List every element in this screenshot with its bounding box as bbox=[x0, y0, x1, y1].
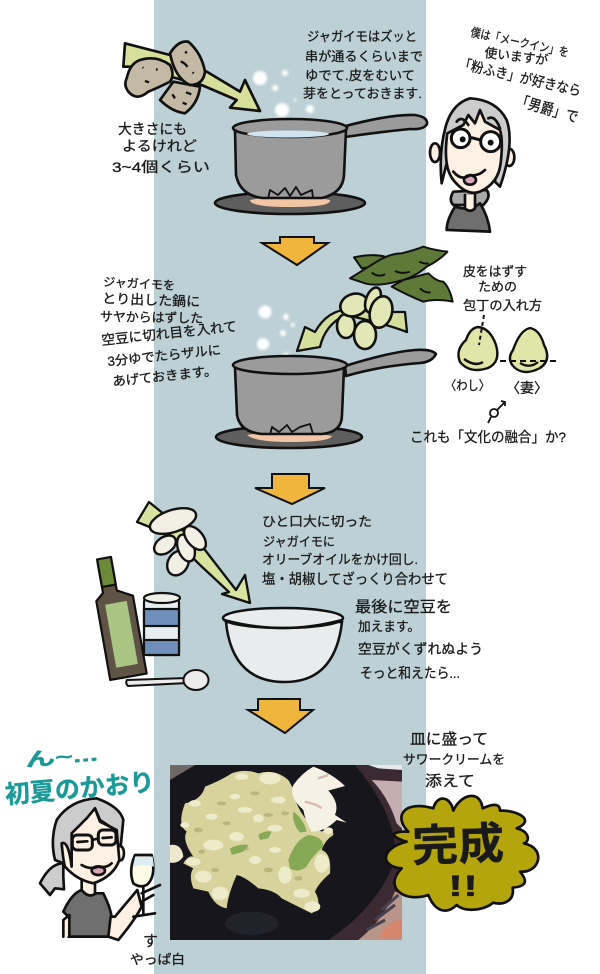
text: plate and sour cream: サワークリームを bbox=[403, 752, 505, 767]
text: cultural fusion note: これも「文化の融合」か? bbox=[410, 429, 566, 445]
text: boil potatoes instructions: ゆでて.皮をむいて bbox=[305, 68, 415, 83]
icon: dark green bean pods bbox=[350, 247, 453, 302]
text: plate and sour cream bbox=[403, 731, 505, 790]
text: dressing and mixing instructions: ひと口大に切った bbox=[262, 514, 372, 529]
text: still white wine note bbox=[130, 933, 185, 967]
text: cook beans instructions: 3分ゆでたらザルに bbox=[107, 342, 222, 369]
icon: ponytail bbox=[40, 863, 64, 895]
text: speech about mayqueen and danshaku: 僕は「メークイン」を bbox=[469, 25, 570, 60]
text: bean labels bbox=[445, 378, 548, 396]
step 2: beans entering the pan bbox=[297, 247, 453, 351]
text: boil potatoes instructions: ジャガイモはズッと bbox=[307, 29, 417, 44]
icon: green arrow into bowl bbox=[137, 502, 250, 603]
icon: shelled beans bbox=[337, 285, 396, 349]
icon: mixing bowl bbox=[223, 608, 343, 682]
text: potato quantity: 大きさにも bbox=[118, 121, 187, 137]
step 1: potatoes entering the pan bbox=[123, 41, 260, 113]
step 3: potatoes into bowl bbox=[137, 502, 250, 603]
text: potato quantity: 3~4個くらい bbox=[112, 159, 210, 175]
text: cook beans instructions: 空豆に切れ目を入れて bbox=[101, 319, 238, 348]
text: teal exclamation: 初夏のかおり bbox=[4, 769, 156, 810]
icon: spoon with salt bbox=[126, 670, 208, 690]
text: potato quantity: よるけれど bbox=[122, 138, 197, 154]
text: dressing and mixing instructions: 空豆がくずれぬよう bbox=[358, 641, 483, 657]
text: bean labels: 〈妻〉 bbox=[506, 380, 548, 396]
text: speech about mayqueen and danshaku: 「粉ふき」が好きなら bbox=[457, 55, 583, 99]
icon: male symbol bbox=[488, 401, 505, 423]
text: cutting heading bbox=[463, 264, 542, 313]
icon: pan on burner 1 bbox=[215, 115, 427, 214]
text: bean labels: 〈わし〉 bbox=[445, 378, 490, 393]
text: dressing and mixing instructions: 塩・胡椒してざっくり合わせて bbox=[262, 571, 448, 587]
callout: finished burst bbox=[386, 796, 538, 911]
text: still white wine note: す bbox=[143, 933, 158, 950]
text: dressing and mixing instructions: 加えます。 bbox=[358, 619, 420, 634]
callout: finished burst: !! bbox=[448, 870, 478, 903]
icon: pan on burner 2 bbox=[216, 350, 436, 448]
text: plate and sour cream: 添えて bbox=[425, 773, 475, 790]
text: plate and sour cream: 皿に盛って bbox=[410, 731, 488, 748]
text: teal exclamation: ん~... bbox=[24, 744, 99, 772]
text: cook beans instructions: とり出した鍋に bbox=[102, 291, 200, 309]
text: speech about mayqueen and danshaku bbox=[457, 25, 583, 126]
icon: green arrow into pan bbox=[123, 43, 260, 111]
text: boil potatoes instructions bbox=[303, 29, 423, 101]
text: cutting heading: ための bbox=[478, 280, 517, 294]
icon: curved green arrow bbox=[297, 309, 407, 351]
text: cook beans instructions: あげておきます。 bbox=[112, 363, 218, 389]
text: potato quantity bbox=[112, 121, 210, 175]
icon: right bean bbox=[500, 328, 558, 372]
photo: finished salad on black plate bbox=[170, 765, 403, 940]
icon: t-shirt bbox=[63, 890, 112, 937]
arrow: orange 2 bbox=[255, 474, 325, 504]
text: teal exclamation bbox=[1, 740, 156, 810]
icon: wine glass bbox=[131, 855, 155, 917]
text: speech about mayqueen and danshaku: 使いますが bbox=[484, 45, 549, 68]
arrow: orange 1 bbox=[262, 237, 328, 265]
icon: steam 1 bbox=[253, 70, 314, 117]
icon: left bean bbox=[458, 315, 497, 370]
icon: steam 2 bbox=[257, 306, 295, 360]
text: dressing and mixing instructions: オリーブオイルをかけ回し. bbox=[262, 552, 418, 567]
icon: head bbox=[53, 798, 124, 883]
text: speech about mayqueen and danshaku: 「男爵」で bbox=[514, 93, 580, 126]
icon: spice jar bbox=[144, 593, 180, 655]
text: dressing and mixing instructions: そっと和えたら... bbox=[360, 665, 460, 681]
text: cook beans instructions bbox=[100, 275, 238, 389]
text: cook beans instructions: サヤからはずした bbox=[100, 309, 203, 326]
callout: finished burst: 完成 bbox=[411, 819, 505, 872]
text: dressing and mixing instructions: 最後に空豆を bbox=[355, 598, 452, 616]
text: cook beans instructions: ジャガイモを bbox=[103, 275, 175, 293]
text: boil potatoes instructions: 串が通るくらいまで bbox=[305, 49, 423, 64]
diagram: how to cut the bean skin bbox=[410, 264, 566, 445]
text: cutting heading: 包丁の入れ方 bbox=[463, 298, 542, 313]
text: cutting heading: 皮をはずす bbox=[463, 264, 527, 279]
arrow: orange 3 bbox=[248, 699, 313, 733]
character: man tasting white wine bbox=[40, 798, 160, 940]
icon: olive oil bottle bbox=[89, 554, 147, 680]
background column bbox=[154, 0, 426, 974]
text: boil potatoes instructions: 芽をとっておきます. bbox=[303, 86, 422, 101]
text: dressing and mixing instructions: ジャガイモに bbox=[263, 535, 335, 549]
icon: potatoes bbox=[125, 41, 205, 113]
icon: potato pieces bbox=[147, 503, 210, 579]
text: still white wine note: やっぱ白 bbox=[130, 952, 185, 967]
text: dressing and mixing instructions bbox=[262, 514, 483, 681]
character: man with glasses and speech bbox=[430, 98, 514, 232]
